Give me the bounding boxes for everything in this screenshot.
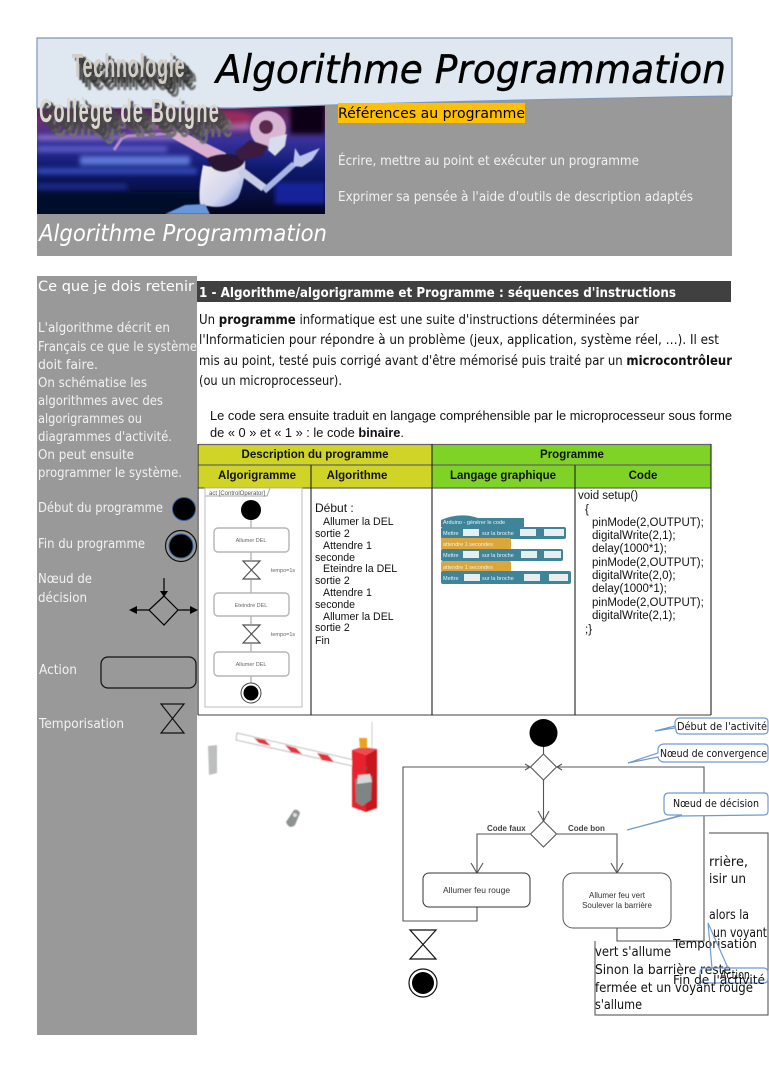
graphical language blocks: sur la broche [482, 531, 514, 537]
convergence node [530, 754, 556, 780]
callout: noeud de décision [627, 793, 768, 830]
table column headings: Algorithme [327, 470, 387, 482]
school logo text: Technologie [75, 49, 188, 87]
school logo text: Collège de Boigne [53, 106, 233, 144]
intro paragraph [199, 313, 733, 389]
code text: pinMode(2,OUTPUT); [592, 517, 704, 529]
scenario text box: isir un [709, 872, 746, 887]
callout: action [700, 923, 768, 983]
activity flowchart [403, 719, 704, 997]
school logo text: Technologie [84, 59, 197, 97]
scenario text box: vert s'allume [595, 945, 671, 960]
graphical language blocks: Mettre [443, 553, 459, 559]
school logo text: Technologie [72, 46, 185, 84]
sidebar text: doit faire. [38, 358, 98, 373]
sidebar text [38, 321, 197, 481]
callout: temporisation: Temporisation [672, 936, 757, 951]
algorithm text: Eteindre la DEL [323, 563, 397, 575]
programme references: Écrire, mettre au point et exécuter un programme [338, 153, 639, 169]
table column headings: Description du programme [242, 449, 388, 461]
legend: action: Action [39, 663, 77, 678]
callout: début de l'activité [655, 718, 768, 734]
legend: temporisation [38, 704, 184, 733]
binary code paragraph [210, 408, 732, 440]
legend: noeud de décision: décision [38, 591, 87, 606]
scenario text box: fermée et un voyant rouge [595, 981, 753, 996]
callout: noeud de convergence [628, 744, 768, 763]
algorigramme diagram: tempo=1s [271, 632, 295, 638]
start node [530, 719, 558, 747]
code text: ;} [585, 624, 592, 636]
school logo text: Collège de Boigne [42, 94, 222, 132]
intro paragraph: mis au point, testé puis corrigé avant d'être mémorisé puis traité par un microcontrôleur [199, 354, 733, 369]
action: allumer feu rouge: Allumer feu rouge [443, 885, 510, 895]
graphical language blocks: sur la broche [482, 576, 514, 582]
base [165, 204, 210, 214]
action: allumer feu vert [563, 873, 671, 928]
code text: void setup() [578, 490, 638, 502]
algorithm text: Fin [315, 635, 330, 647]
algorigramme diagram [205, 488, 302, 707]
sidebar panel: ce que je dois retenir [37, 276, 198, 1035]
sidebar text: algorithmes avec des [38, 394, 163, 409]
table column headings: Langage graphique [450, 470, 556, 482]
graphical language blocks: attendre 1 secondes [443, 542, 493, 548]
legend: noeud de décision [38, 572, 198, 625]
callout: noeud de décision: Nœud de décision [673, 798, 759, 810]
end node [409, 969, 437, 997]
algorithm text: Attendre 1 [323, 587, 372, 599]
sidebar text: On peut ensuite [38, 448, 134, 463]
algorithm text: seconde [315, 599, 355, 611]
code text: digitalWrite(2,0); [592, 570, 676, 582]
school logo text: Collège de Boigne [49, 102, 229, 140]
algorithm text: sortie 2 [315, 575, 350, 587]
programme references: Exprimer sa pensée à l'aide d'outils de description adaptés [338, 190, 693, 205]
code text: { [585, 504, 589, 516]
callout: action: Action [720, 968, 750, 982]
head [250, 111, 286, 147]
school logo text: Technologie [81, 56, 194, 94]
code text: delay(1000*1); [592, 543, 667, 555]
sidebar text: Français ce que le système [38, 340, 197, 355]
school logo text: Collège de Boigne [46, 98, 226, 136]
table column headings: Code [629, 470, 657, 482]
robot illustration [37, 98, 325, 214]
legend: début du programme [38, 498, 196, 520]
programme references [338, 103, 693, 205]
header panel [37, 38, 732, 256]
intro paragraph: Un programme informatique est une suite d'instructions déterminées par [199, 313, 640, 328]
header subtitle: Algorithme Programmation [37, 221, 327, 247]
action: allumer feu vert: Allumer feu vert [589, 891, 646, 900]
legend: noeud de décision: Nœud de [38, 572, 92, 587]
algorithm text: Allumer la DEL [323, 611, 394, 623]
table: programme description [198, 444, 711, 715]
algorigramme diagram: tempo=1s [271, 568, 295, 574]
legend: action [39, 657, 196, 688]
graphical language blocks: attendre 1 secondes [443, 565, 493, 571]
graphical language blocks: Arduino - générer le code [443, 520, 505, 526]
sidebar text: programmer le système. [38, 466, 182, 481]
activity flowchart: Code bon [568, 824, 605, 833]
binary code paragraph: de « 0 » et « 1 » : le code binaire. [210, 425, 404, 440]
graphical language blocks: Mettre [443, 531, 459, 537]
binary code paragraph: Le code sera ensuite traduit en langage compréhensible par le microprocesseur sous forme [210, 408, 732, 423]
branch labels: Code faux [487, 824, 526, 833]
sidebar text: algorigrammes ou [38, 412, 142, 427]
graphical language blocks [441, 515, 571, 584]
scenario text box: rrière, [709, 855, 748, 870]
sidebar text: On schématise les [38, 376, 147, 391]
torso [199, 160, 245, 207]
algorithm text: sortie 2 [315, 622, 350, 634]
intro paragraph: (ou un microprocesseur). [199, 374, 342, 389]
school logo text [39, 46, 233, 144]
code text: delay(1000*1); [592, 583, 667, 595]
front arm [240, 170, 264, 188]
school logo text: Collège de Boigne [39, 91, 219, 129]
sidebar heading: Ce que je dois retenir [38, 279, 194, 295]
school logo text: Technologie [78, 52, 191, 90]
main title: Algorithme Programmation [213, 48, 726, 93]
scenario text box: alors la [709, 908, 749, 923]
code text: pinMode(2,OUTPUT); [592, 557, 704, 569]
callout: fin de l'activité: Fin de l'activité [673, 972, 765, 987]
legend: fin du programme [38, 530, 196, 562]
action: allumer feu vert: Soulever la barrière [582, 901, 652, 910]
scenario text box: s'allume [595, 998, 642, 1013]
timer icon [410, 930, 436, 959]
legend: début du programme: Début du programme [38, 501, 163, 516]
legend: fin du programme: Fin du programme [38, 537, 145, 552]
barrier illustration [208, 722, 377, 827]
code text [578, 490, 704, 636]
table column headings: Algorigramme [218, 470, 296, 482]
rear arm [114, 133, 177, 150]
scenario text box [590, 828, 768, 1015]
algorigramme diagram: Allumer DEL [236, 538, 266, 544]
connectors [403, 747, 704, 941]
code text: pinMode(2,OUTPUT); [592, 597, 704, 609]
legend: temporisation: Temporisation [38, 717, 124, 732]
code text: digitalWrite(2,1); [592, 530, 676, 542]
scenario text box: Sinon la barrière reste [595, 963, 731, 978]
graphical language blocks: Mettre [443, 576, 459, 582]
algorithm text: seconde [315, 552, 355, 564]
graphical language blocks: sur la broche [482, 553, 514, 559]
intro paragraph: l'Informaticien pour répondre à un problème (jeux, application, système réel, …). Il est [199, 333, 719, 348]
algorigramme diagram: Eteindre DEL [235, 603, 267, 609]
action: allumer feu rouge [423, 873, 530, 907]
algorigramme diagram: act [ControlOperator] [209, 491, 265, 497]
sidebar text: diagrammes d'activité. [38, 430, 172, 445]
algorithm text: Attendre 1 [323, 540, 372, 552]
table column headings [218, 449, 657, 482]
section heading: 1 - Algorithme/algorigramme et Programme : séquences d'instructions [199, 285, 676, 301]
sidebar text: L'algorithme décrit en [38, 321, 170, 336]
algorithm text [315, 501, 397, 647]
algorithm text: sortie 2 [315, 528, 350, 540]
blue banner [37, 38, 732, 108]
decision node [530, 821, 556, 847]
code text: digitalWrite(2,1); [592, 610, 676, 622]
algorithm text: Allumer la DEL [323, 516, 394, 528]
algorithm text: Début : [315, 501, 354, 515]
programme references: Références au programme [338, 106, 525, 122]
algorigramme diagram: Allumer DEL [236, 662, 266, 668]
table column headings: Programme [540, 449, 604, 461]
